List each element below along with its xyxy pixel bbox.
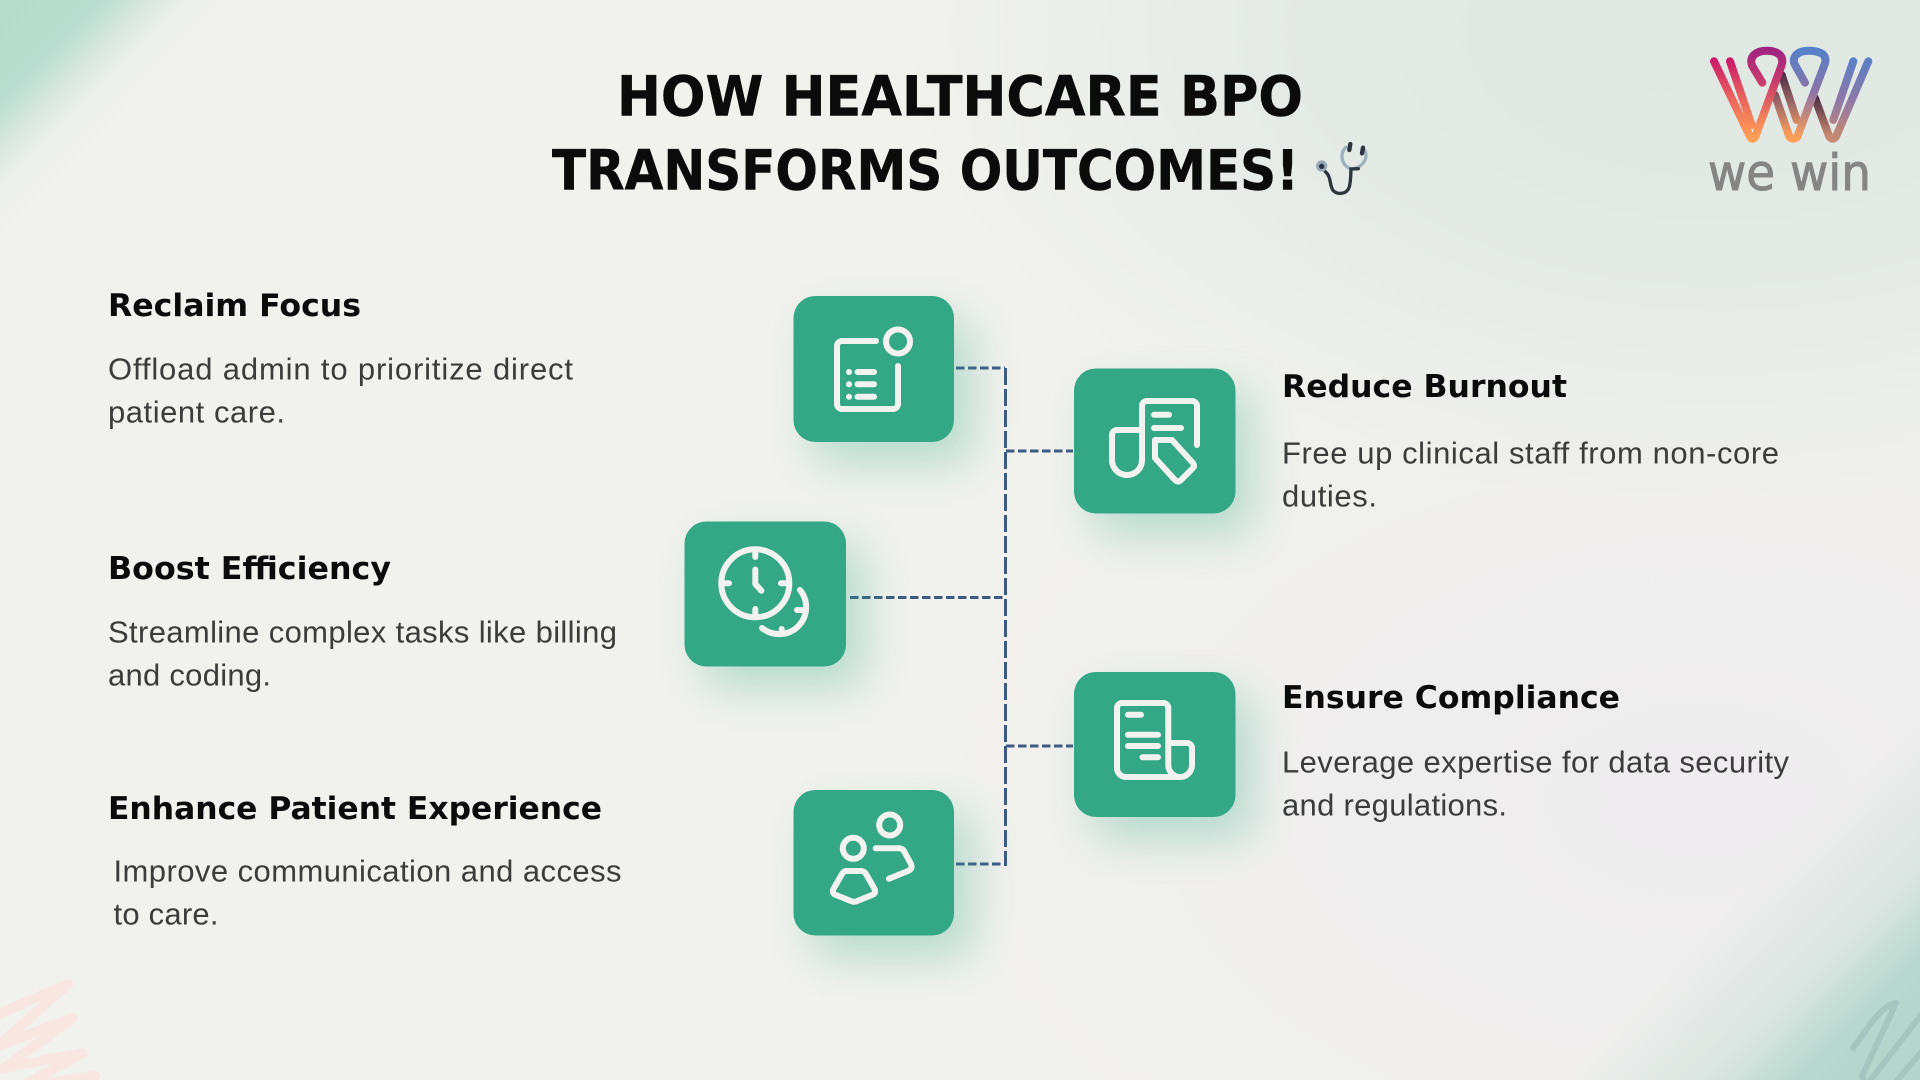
body text: Offload admin to prioritize direct	[108, 352, 573, 386]
title: TRANSFORMS OUTCOMES!	[552, 138, 1299, 202]
panel: reduce burnout	[1282, 369, 1779, 514]
body text: patient care.	[108, 394, 285, 430]
body text: Free up clinical staff from non-core	[1282, 436, 1779, 470]
heading: Reduce Burnout	[1282, 369, 1567, 405]
body text: to care.	[114, 896, 218, 932]
title	[552, 64, 1303, 202]
panel: reclaim focus	[108, 288, 573, 430]
connector lines	[850, 368, 1073, 866]
panel: ensure compliance	[1282, 680, 1790, 822]
heading: Ensure Compliance	[1282, 680, 1620, 716]
icon card: document with tag	[1074, 368, 1253, 535]
heading: Reclaim Focus	[108, 288, 361, 324]
icon card: clipboard list	[794, 296, 973, 464]
decorative scribble: bottom left	[0, 984, 95, 1080]
heading: Enhance Patient Experience	[108, 791, 602, 827]
body text: Leverage expertise for data security	[1282, 744, 1790, 780]
logo wordmark: we win	[1708, 144, 1871, 202]
body text: Streamline complex tasks like billing	[108, 614, 617, 650]
body text: and regulations.	[1282, 788, 1507, 822]
icon: stethoscope	[1316, 144, 1366, 193]
body text: and coding.	[108, 658, 271, 692]
body text	[108, 352, 573, 430]
body text	[1282, 744, 1790, 822]
heading: Boost Efficiency	[108, 551, 391, 587]
logo: we win	[1708, 51, 1871, 202]
body text	[108, 614, 617, 692]
decorative scribble: bottom right	[1853, 1003, 1920, 1080]
icon card: people	[794, 790, 973, 958]
panel: boost efficiency	[108, 551, 617, 692]
body text	[114, 854, 622, 932]
body text	[1282, 436, 1779, 514]
icon card: clocks	[684, 522, 865, 688]
icon card: document roll	[1074, 672, 1253, 839]
title: HOW HEALTHCARE BPO	[617, 64, 1303, 128]
body text: Improve communication and access	[114, 854, 622, 888]
panel: enhance patient experience	[108, 791, 622, 932]
body text: duties.	[1282, 478, 1377, 514]
logo mark	[1714, 51, 1868, 139]
